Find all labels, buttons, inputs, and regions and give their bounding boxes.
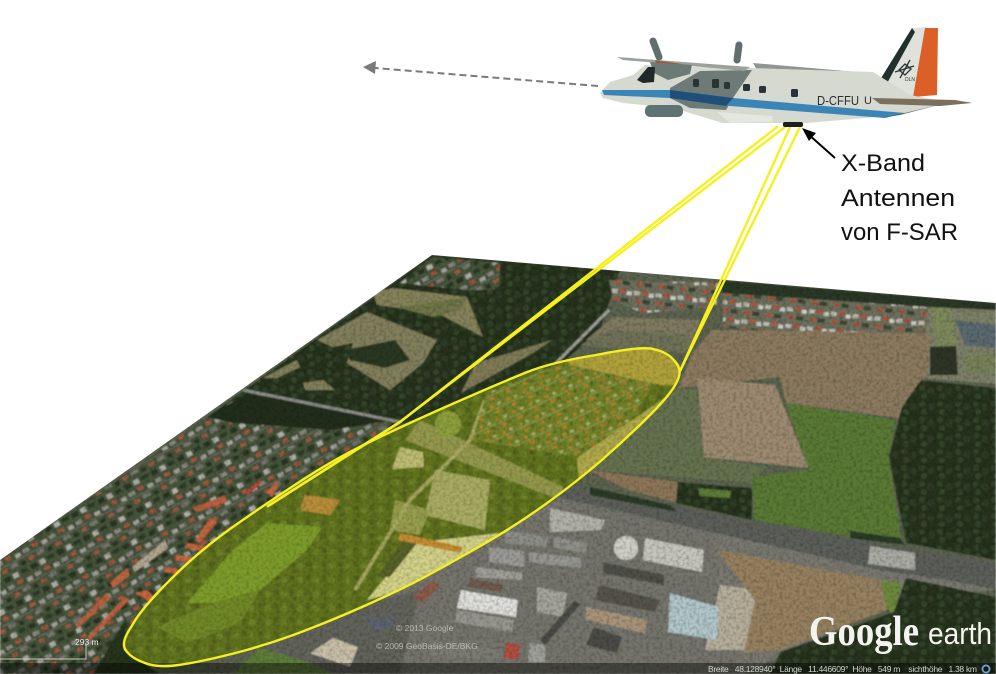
antennas	[783, 122, 803, 127]
icon: status indicator	[982, 665, 990, 673]
aircraft	[600, 27, 973, 127]
noise texture	[0, 250, 996, 674]
region: far-right corner	[921, 307, 996, 384]
DLN tag: DLN	[905, 77, 915, 83]
field: small brown	[588, 470, 678, 502]
field: small green	[881, 580, 902, 613]
blue stripe	[602, 90, 905, 118]
forest: bottom right	[770, 578, 996, 674]
flight direction dashed arrow	[363, 61, 598, 86]
forest: small with clearing	[676, 482, 752, 520]
antenna label	[841, 150, 958, 246]
pod	[645, 105, 683, 117]
ellipse interior ground	[110, 340, 690, 670]
region: right residential	[723, 293, 930, 337]
highway	[243, 310, 996, 587]
far wing	[753, 63, 857, 76]
aircraft: U	[864, 95, 872, 107]
tail dark edge	[875, 28, 915, 88]
yellow radar beams	[268, 127, 800, 506]
antenna label: Antennen	[841, 185, 955, 212]
field: green meadow	[752, 403, 902, 545]
region: upper-left forest and meadows	[207, 255, 620, 430]
apartment blocks	[75, 480, 278, 674]
nacelle	[650, 62, 692, 80]
forest: right	[889, 380, 996, 560]
field: top grey-brown	[586, 317, 700, 353]
Google earth logo	[809, 609, 992, 655]
lower sponson	[717, 112, 773, 123]
DLR logo	[895, 60, 914, 78]
scale bar	[0, 637, 99, 659]
bottom status bar	[0, 663, 996, 674]
antenna pointer arrow	[802, 128, 835, 158]
fuselage	[600, 65, 973, 123]
satellite ground image	[0, 250, 996, 674]
tail fin	[875, 27, 926, 97]
cockpit window	[637, 67, 655, 83]
propellers	[653, 41, 739, 60]
dark tail underside	[880, 105, 937, 118]
field: green-grey	[590, 388, 767, 483]
imagery copyright: © 2009 GeoBasis-DE/BKG	[376, 641, 478, 651]
Google earth logo: Google	[809, 609, 919, 655]
scale bar: 293 m	[75, 637, 99, 647]
imagery copyright: © 2013 Google	[396, 623, 454, 633]
region: top-right tree line	[719, 280, 996, 312]
region: left residential	[0, 390, 400, 674]
field: tan striped	[697, 378, 809, 468]
field: brown large	[678, 330, 930, 418]
yellow footprint ellipse	[124, 348, 680, 666]
rudder	[913, 28, 938, 97]
region: top residential	[609, 280, 719, 313]
shadow under wing	[670, 70, 752, 110]
antenna label: X-Band	[841, 150, 925, 177]
registration: D-CFFU	[817, 94, 859, 108]
field: bottom brown	[717, 550, 887, 653]
industrial area	[230, 490, 996, 674]
status text: Breite 48.128940° Länge 11.446609° Höhe 549 m sichthöhe 1.38 km	[708, 664, 977, 674]
antenna label: von F-SAR	[841, 219, 958, 246]
cabin windows	[693, 79, 798, 97]
wing	[617, 57, 750, 71]
imagery copyright	[376, 623, 478, 651]
